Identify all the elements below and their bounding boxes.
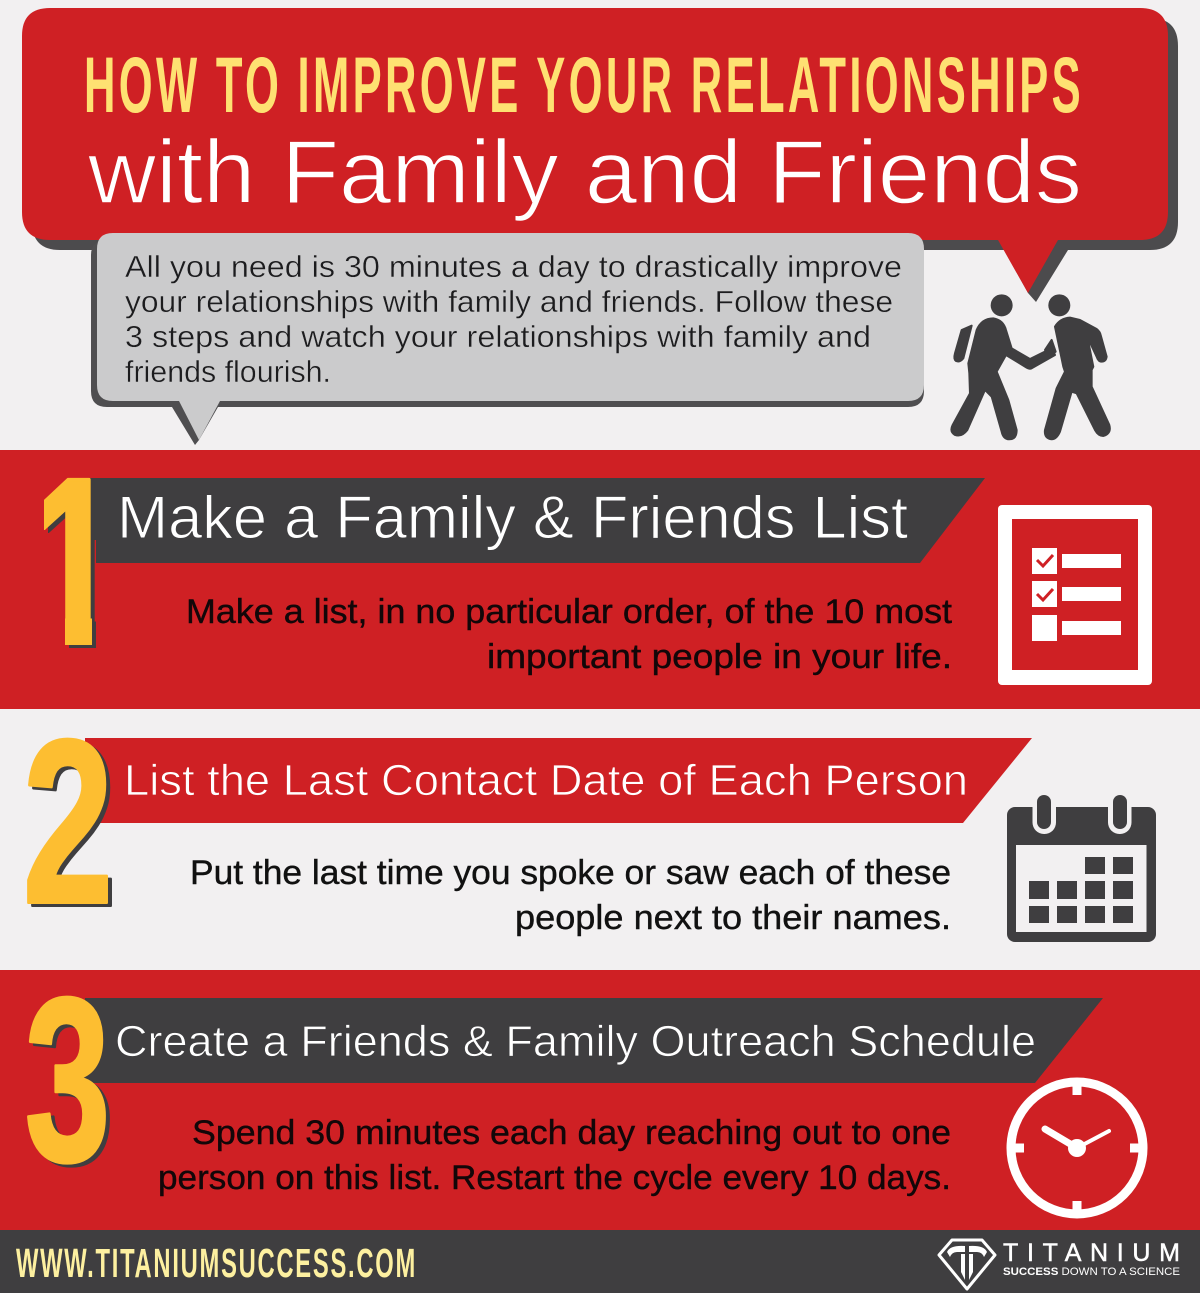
intro text: your relationships with family and friends. Follow these <box>125 284 893 319</box>
step 2 heading banner <box>85 738 1032 823</box>
step 1 number: 1 <box>28 428 120 696</box>
icon: two people shaking hands <box>951 294 1110 439</box>
intro text <box>125 249 902 389</box>
step 3 number <box>24 948 114 1214</box>
step 3 body text: Spend 30 minutes each day reaching out to one <box>192 1114 951 1152</box>
step 3 heading banner <box>85 998 1103 1083</box>
panel: title speech bubble <box>22 8 1178 302</box>
step 1 body text: Make a list, in no particular order, of the 10 most <box>186 593 953 631</box>
logo wordmark: TITANIUM <box>1003 1239 1180 1267</box>
step 2 body text: Put the last time you spoke or saw each of these <box>190 854 951 892</box>
panel: step 2 <box>22 690 1156 956</box>
icon: calendar <box>1007 790 1156 942</box>
panel: intro speech bubble <box>91 233 924 445</box>
step 2 body text <box>190 854 951 937</box>
step 3 body text <box>158 1114 951 1197</box>
icon: clock <box>1009 1080 1145 1216</box>
step 3 number: 3 <box>28 952 114 1214</box>
intro text: 3 steps and watch your relationships with family and <box>125 319 871 354</box>
step 1 number <box>44 478 96 648</box>
intro text: friends flourish. <box>125 354 331 389</box>
step 1 body text <box>186 593 953 676</box>
panel: step 1 <box>0 428 1200 709</box>
step 2 number: 2 <box>26 694 118 956</box>
step 3 number: 3 <box>24 948 110 1210</box>
step 1 heading banner: Make a Family & Friends List <box>117 484 908 551</box>
title line 2: with Family and Friends <box>87 123 1082 223</box>
icon: Titanium diamond logo <box>939 1240 995 1289</box>
step 1 number: 1 <box>32 431 124 699</box>
step 2 body text: people next to their names. <box>515 899 951 937</box>
step 3 body text: person on this list. Restart the cycle every 10 days. <box>158 1159 951 1197</box>
step 2 number: 2 <box>22 690 114 952</box>
step 1 heading banner <box>90 478 985 563</box>
logo wordmark: SUCCESS DOWN TO A SCIENCE <box>1003 1266 1180 1278</box>
panel: step 3 <box>0 948 1200 1230</box>
step 1 body text: important people in your life. <box>487 638 952 676</box>
step 3 heading banner: Create a Friends & Family Outreach Schedule <box>115 1017 1036 1066</box>
panel: footer <box>0 1230 1200 1293</box>
intro text: All you need is 30 minutes a day to drastically improve <box>125 249 902 284</box>
step 2 heading banner: List the Last Contact Date of Each Person <box>124 756 968 805</box>
icon: checklist <box>998 505 1152 685</box>
footer website address: WWW.TITANIUMSUCCESS.COM <box>16 1240 417 1286</box>
